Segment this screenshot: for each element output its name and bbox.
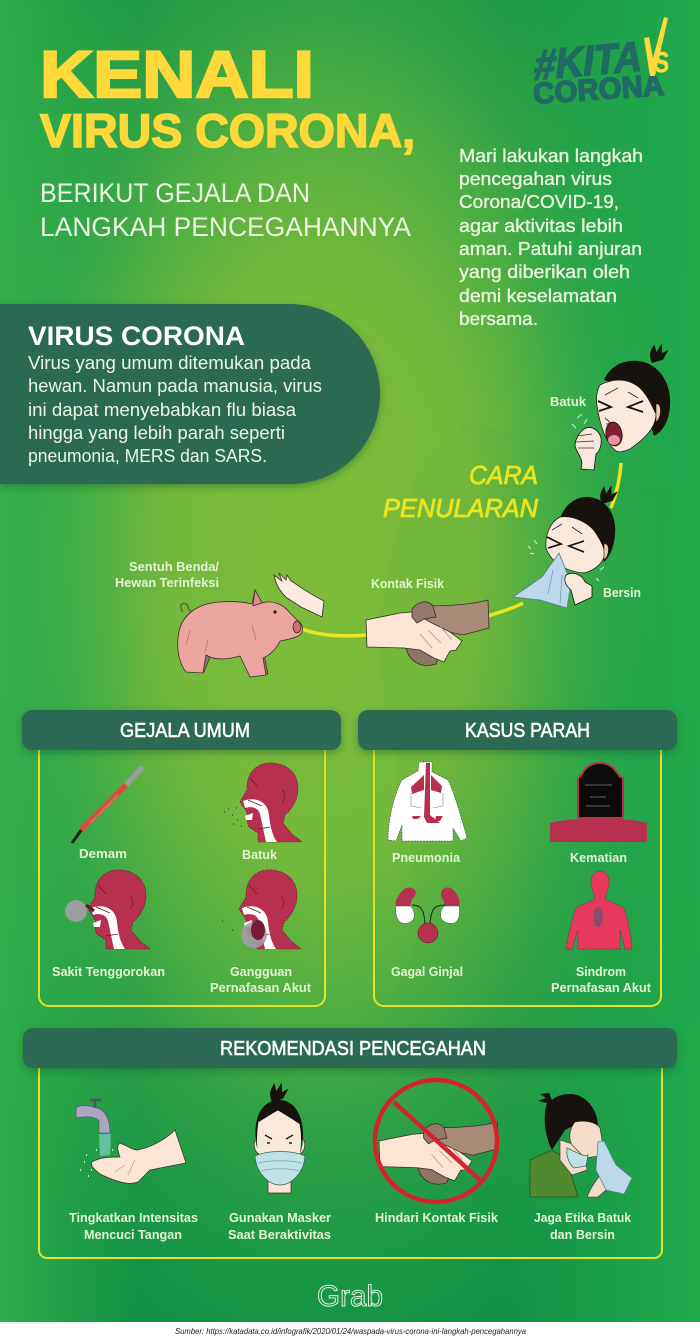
icon: thermometer bbox=[72, 767, 143, 843]
intro paragraph bbox=[459, 145, 643, 329]
label: kontak fisik: Kontak Fisik bbox=[371, 577, 444, 591]
label: kematian: Kematian bbox=[570, 851, 627, 865]
icon: washing hands bbox=[76, 1100, 186, 1183]
panel: virus corona bbox=[0, 304, 380, 484]
heading: cara penularan: CARA bbox=[469, 460, 538, 490]
intro paragraph: pencegahan virus bbox=[459, 168, 612, 189]
heading: KASUS PARAH bbox=[465, 720, 590, 742]
intro paragraph: Corona/COVID-19, bbox=[459, 191, 619, 212]
subtitle: LANGKAH PENCEGAHANNYA bbox=[40, 212, 411, 242]
label: gangguan pernafasan akut: Pernafasan Akut bbox=[210, 981, 312, 995]
logo: grab: Grab bbox=[317, 1280, 383, 1313]
label: jaga etika batuk: dan Bersin bbox=[550, 1228, 615, 1242]
label: pneumonia: Pneumonia bbox=[392, 851, 461, 865]
illustration: sneezing head bbox=[513, 485, 618, 608]
footer: source bbox=[0, 1322, 700, 1344]
label: sentuh benda: Sentuh Benda/ bbox=[129, 560, 220, 574]
heading: cara penularan bbox=[383, 460, 538, 523]
label: tingkatkan intensitas mencuci tangan bbox=[69, 1211, 198, 1242]
label: jaga etika batuk: Jaga Etika Batuk bbox=[534, 1211, 631, 1225]
panel text: hewan. Namun pada manusia, virus bbox=[28, 376, 322, 396]
panel outline bbox=[39, 1058, 662, 1258]
label: tingkatkan intensitas mencuci tangan: Mencuci Tangan bbox=[84, 1228, 182, 1242]
label: gangguan pernafasan akut: Gangguan bbox=[230, 965, 292, 979]
icon: sakit tenggorokan head bbox=[65, 870, 150, 949]
intro paragraph: bersama. bbox=[459, 308, 538, 329]
icon: pneumonia torso bbox=[388, 762, 467, 841]
heading: REKOMENDASI PENCEGAHAN bbox=[220, 1038, 486, 1060]
transmission chain line bbox=[302, 463, 621, 636]
heading: cara penularan: PENULARAN bbox=[383, 493, 538, 523]
icon: person coughing etiquette bbox=[530, 1093, 632, 1197]
logo: #KitaVsCorona bbox=[532, 17, 672, 111]
icon: tombstone bbox=[550, 763, 647, 842]
icon: sindrom torso bbox=[566, 871, 632, 949]
panel text: hingga yang lebih parah seperti bbox=[28, 423, 285, 443]
label: batuk: Batuk bbox=[242, 848, 277, 862]
panel outline bbox=[374, 740, 661, 1006]
panel text: Virus yang umum ditemukan pada bbox=[28, 353, 312, 373]
label: sakit tenggorokan: Sakit Tenggorokan bbox=[52, 965, 165, 979]
label: demam: Demam bbox=[79, 847, 127, 861]
label: gunakan masker bbox=[228, 1211, 331, 1242]
icon: person wearing mask bbox=[254, 1082, 305, 1193]
label: gunakan masker: Saat Beraktivitas bbox=[228, 1228, 331, 1242]
label: tingkatkan intensitas mencuci tangan: Tingkatkan Intensitas bbox=[69, 1211, 198, 1225]
footer: source: Sumber: https://katadata.co.id/infografik/2020/01/24/waspada-virus-corona-ini-langkah-pencegahannya bbox=[175, 1326, 526, 1336]
illustration: hand touching pig bbox=[274, 573, 324, 617]
heading: GEJALA UMUM bbox=[120, 720, 250, 742]
label: sindrom pernafasan akut bbox=[551, 965, 652, 995]
label: sindrom pernafasan akut: Pernafasan Akut bbox=[551, 981, 652, 995]
label: sindrom pernafasan akut: Sindrom bbox=[576, 965, 626, 979]
subtitle bbox=[40, 178, 411, 242]
panel text: pneumonia, MERS dan SARS. bbox=[28, 446, 267, 466]
illustration: coughing head bbox=[572, 343, 670, 470]
title: VIRUS CORONA, bbox=[40, 104, 415, 157]
icon: gangguan pernafasan head bbox=[222, 870, 301, 949]
header bar bbox=[22, 710, 341, 750]
title bbox=[40, 37, 415, 157]
logo: #KitaVsCorona: s bbox=[652, 39, 672, 82]
panel outline bbox=[39, 740, 325, 1006]
logo: #KitaVsCorona: CORONA bbox=[532, 69, 665, 111]
panel: kasus parah bbox=[358, 710, 677, 1006]
icon: no handshake bbox=[375, 1080, 498, 1202]
label: sentuh benda: Hewan Terinfeksi bbox=[115, 576, 219, 590]
intro paragraph: aman. Patuhi anjuran bbox=[459, 238, 642, 259]
illustration: pig bbox=[178, 590, 302, 677]
subtitle: BERIKUT GEJALA DAN bbox=[40, 178, 310, 208]
intro paragraph: demi keselamatan bbox=[459, 285, 617, 306]
intro paragraph: Mari lakukan langkah bbox=[459, 145, 643, 166]
label: sentuh benda bbox=[115, 560, 220, 590]
panel: rekomendasi pencegahan bbox=[23, 1028, 677, 1258]
panel heading: VIRUS CORONA bbox=[28, 321, 245, 351]
label: gunakan masker: Gunakan Masker bbox=[229, 1211, 331, 1225]
panel text bbox=[28, 353, 322, 466]
header bar bbox=[358, 710, 677, 750]
intro paragraph: yang diberikan oleh bbox=[459, 261, 630, 282]
title: KENALI bbox=[40, 37, 314, 111]
icon: batuk head bbox=[224, 763, 302, 842]
label: gagal ginjal: Gagal Ginjal bbox=[391, 965, 463, 979]
panel: gejala umum bbox=[22, 710, 341, 1006]
header bar bbox=[23, 1028, 677, 1068]
label: bersin: Bersin bbox=[603, 586, 641, 600]
intro paragraph: agar aktivitas lebih bbox=[459, 215, 623, 236]
panel text: ini dapat menyebabkan flu biasa bbox=[28, 400, 297, 420]
illustration: handshake bbox=[366, 600, 489, 665]
logo: #KitaVsCorona: #KITA bbox=[532, 32, 645, 89]
label: hindari kontak fisik: Hindari Kontak Fisik bbox=[375, 1211, 498, 1225]
label: gangguan pernafasan akut bbox=[210, 965, 312, 995]
icon: kidneys bbox=[396, 888, 460, 943]
label: batuk: Batuk bbox=[550, 395, 586, 409]
label: jaga etika batuk bbox=[534, 1211, 631, 1242]
